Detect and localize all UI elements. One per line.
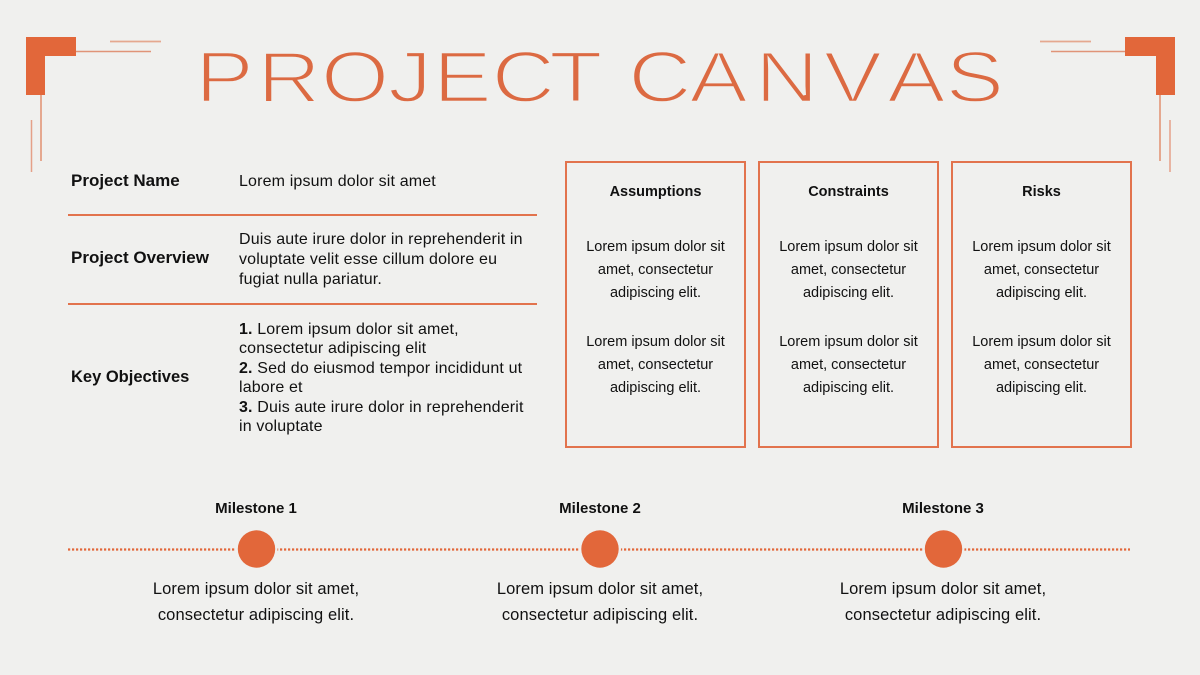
text: assumptions body 2: adipiscing elit. xyxy=(610,380,701,396)
milestone 1 marker xyxy=(236,528,278,570)
milestone 2 marker xyxy=(579,528,621,570)
text: risks body 1: Lorem ipsum dolor sit xyxy=(972,238,1111,254)
timeline xyxy=(68,530,1130,568)
heading: risks: Risks xyxy=(1022,184,1061,200)
text: key objectives list: in voluptate xyxy=(239,418,323,435)
text: key objectives list: consectetur adipiscing elit xyxy=(239,340,426,357)
text: risks body 2: amet, consectetur xyxy=(984,357,1099,373)
text: assumptions body 1: Lorem ipsum dolor sit xyxy=(586,238,725,254)
text: constraints body 2: adipiscing elit. xyxy=(803,380,894,396)
milestone 2 text: consectetur adipiscing elit. xyxy=(502,606,698,624)
text: constraints body 1: adipiscing elit. xyxy=(803,285,894,301)
milestone 3 marker xyxy=(922,528,964,570)
text: risks body 2 xyxy=(972,334,1111,396)
heading: constraints: Constraints xyxy=(808,184,889,200)
panel: assumptions xyxy=(565,161,746,448)
text: project overview value: voluptate velit esse cillum dolore eu xyxy=(239,251,497,268)
label: project name: Project Name xyxy=(71,171,180,190)
milestone 1 text xyxy=(153,580,359,624)
milestone 1 label: Milestone 1 xyxy=(215,500,297,517)
text: assumptions body 2: amet, consectetur xyxy=(598,357,713,373)
text: risks body 2: adipiscing elit. xyxy=(996,380,1087,396)
panel: risks xyxy=(951,161,1132,448)
text: constraints body 1 xyxy=(779,238,918,301)
text: key objectives list: 1. Lorem ipsum dolor sit amet, xyxy=(239,321,459,338)
label: key objectives: Key Objectives xyxy=(71,368,189,386)
text: assumptions body 1: adipiscing elit. xyxy=(610,285,701,301)
milestone 3 label: Milestone 3 xyxy=(902,500,984,517)
text: key objectives list: 2. Sed do eiusmod tempor incididunt ut xyxy=(239,360,522,377)
milestone 3 text: consectetur adipiscing elit. xyxy=(845,606,1041,624)
text: constraints body 1: Lorem ipsum dolor sit xyxy=(779,238,918,254)
milestone 2 text xyxy=(497,580,703,624)
text: project overview value: Duis aute irure dolor in reprehenderit in xyxy=(239,231,523,248)
milestone 1 text: consectetur adipiscing elit. xyxy=(158,606,354,624)
text: constraints body 2 xyxy=(779,334,918,396)
text: constraints body 2: Lorem ipsum dolor sit xyxy=(779,334,918,350)
label: project overview: Project Overview xyxy=(71,248,209,267)
milestone 2 label: Milestone 2 xyxy=(559,500,641,517)
text: constraints body 1: amet, consectetur xyxy=(791,262,906,278)
text: project overview value xyxy=(239,231,523,288)
corner decoration: top left xyxy=(26,37,161,172)
text: key objectives list: labore et xyxy=(239,379,303,396)
milestone 1 text: Lorem ipsum dolor sit amet, xyxy=(153,580,359,598)
text: project overview value: fugiat nulla pariatur. xyxy=(239,271,382,288)
text: project name value: Lorem ipsum dolor sit amet xyxy=(239,173,436,190)
text: risks body 1: amet, consectetur xyxy=(984,262,1099,278)
text: key objectives list xyxy=(239,321,524,435)
panel: project details xyxy=(71,171,524,435)
text: risks body 1: adipiscing elit. xyxy=(996,285,1087,301)
corner decoration: top right xyxy=(1040,37,1175,172)
text: constraints body 2: amet, consectetur xyxy=(791,357,906,373)
panel: constraints xyxy=(758,161,939,448)
text: assumptions body 1: amet, consectetur xyxy=(598,262,713,278)
milestone 2 text: Lorem ipsum dolor sit amet, xyxy=(497,580,703,598)
milestone 3 text xyxy=(840,580,1046,624)
text: key objectives list: 3. Duis aute irure dolor in reprehenderit xyxy=(239,399,524,416)
heading: assumptions: Assumptions xyxy=(610,184,701,200)
text: assumptions body 1 xyxy=(586,238,725,301)
text: assumptions body 2: Lorem ipsum dolor sit xyxy=(586,334,725,350)
text: assumptions body 2 xyxy=(586,334,725,396)
text: risks body 1 xyxy=(972,238,1111,301)
text: risks body 2: Lorem ipsum dolor sit xyxy=(972,334,1111,350)
title: PROJECT CANVAS xyxy=(195,37,1004,118)
milestone 3 text: Lorem ipsum dolor sit amet, xyxy=(840,580,1046,598)
